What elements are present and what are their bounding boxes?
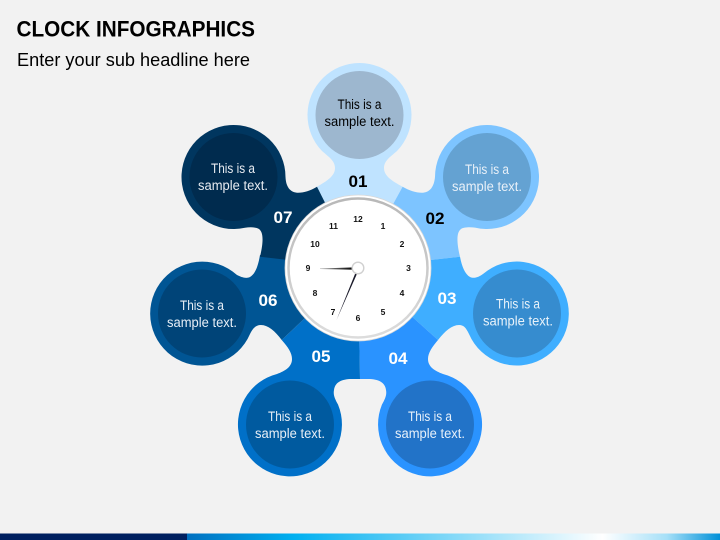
- title: CLOCK INFOGRAPHICS: [16, 16, 255, 42]
- subtitle: Enter your sub headline here: [17, 50, 250, 70]
- petal 02: 02: [426, 209, 444, 228]
- petal 03: 03: [438, 289, 456, 308]
- petal 03: This is a: [496, 296, 540, 312]
- petal 01: This is a: [338, 97, 382, 112]
- clock numbers: 3: [406, 263, 411, 273]
- petal 02: [358, 125, 539, 268]
- petal 05: [238, 268, 360, 476]
- clock numbers: 2: [400, 239, 405, 249]
- petal 05: sample text.: [255, 426, 325, 441]
- clock numbers: 12: [353, 214, 363, 224]
- petal 03: sample text.: [483, 314, 553, 328]
- clock: [285, 195, 431, 341]
- petal 03: [358, 257, 569, 366]
- petal 04: [358, 268, 482, 476]
- clock numbers: 1: [381, 221, 386, 231]
- clock numbers: 5: [381, 307, 386, 317]
- petal 01: 01: [348, 172, 368, 191]
- petal 06: This is a: [180, 298, 224, 313]
- petal 04: sample text.: [395, 426, 465, 441]
- bottom bar: [0, 534, 720, 540]
- clock numbers: 4: [400, 288, 405, 298]
- clock numbers: 6: [356, 313, 361, 323]
- petal 04: 04: [388, 349, 408, 368]
- petal 07: 07: [274, 208, 292, 227]
- petal 01: [308, 63, 412, 268]
- clock centre: [352, 262, 364, 274]
- petal 05: 05: [312, 347, 330, 366]
- clock numbers: 8: [313, 288, 318, 298]
- minute hand: [336, 274, 357, 320]
- clock face: [285, 195, 431, 341]
- clock numbers: 9: [306, 263, 311, 273]
- hour hand: [320, 267, 354, 270]
- petal 02: This is a: [465, 162, 509, 177]
- petal 04: This is a: [408, 409, 452, 424]
- clock numbers: [306, 214, 411, 323]
- petal 07: This is a: [211, 161, 255, 176]
- petal 06: 06: [258, 291, 278, 310]
- petal 07: [182, 125, 358, 268]
- clock numbers: 7: [331, 307, 336, 317]
- petal 05: This is a: [268, 409, 312, 424]
- clock numbers: 11: [329, 221, 338, 231]
- petal 01: sample text.: [324, 114, 394, 129]
- petal 06: [150, 255, 358, 366]
- clock numbers: 10: [310, 239, 320, 249]
- petal 02: sample text.: [452, 179, 522, 194]
- petal 07: sample text.: [198, 178, 268, 193]
- petal 06: sample text.: [167, 315, 237, 330]
